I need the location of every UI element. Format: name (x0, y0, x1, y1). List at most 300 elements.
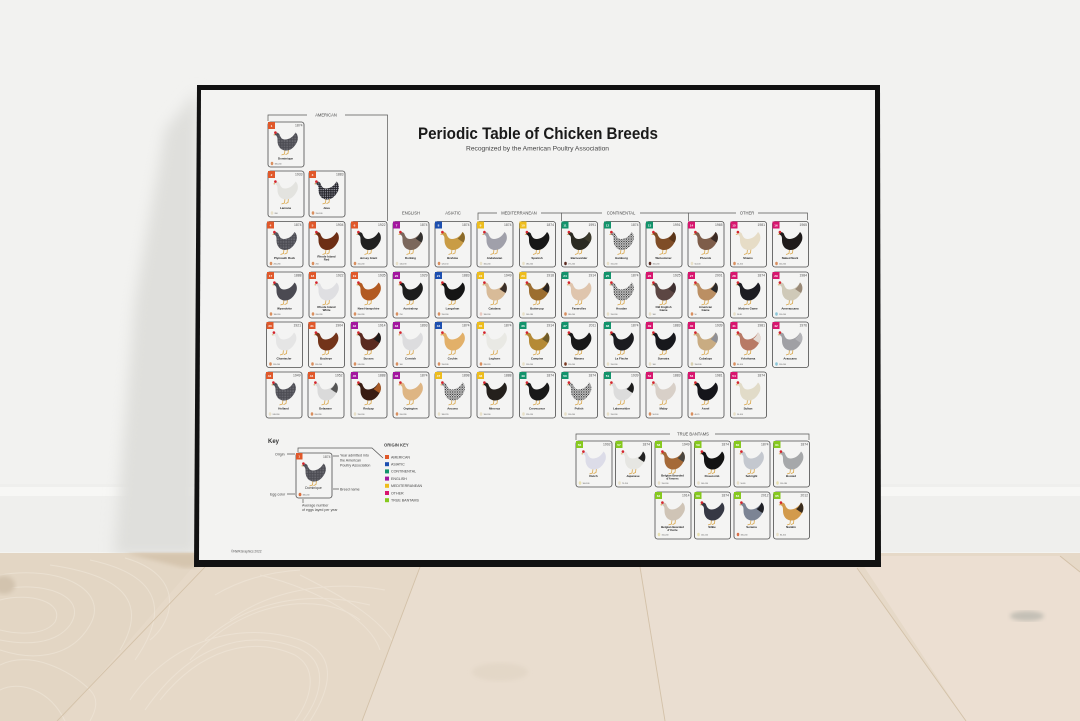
card: Belgian Bearded d'Uccle: 150-200 (662, 534, 668, 536)
card: Nankin: 2012 (800, 494, 808, 498)
card: Buckeye: 1904 (335, 324, 343, 328)
card: Java: 150-180 (316, 213, 322, 215)
card: Buttercup (520, 272, 556, 318)
picture frame (194, 85, 881, 567)
card: Lamona (268, 171, 304, 217)
card: Belgian Bearded d'Anvers: d'Anvers (666, 476, 679, 480)
card: Plymouth Rock: 1874 (294, 223, 302, 227)
card: Welsummer: 1991 (673, 223, 681, 227)
card: Rhode Island White: 18 (311, 274, 314, 278)
key: annotated sample card: Egg color (270, 492, 286, 496)
card: Sumatra: 39 (648, 324, 651, 328)
card: Orpington: 1874 (420, 374, 428, 378)
card: Dominique (268, 122, 304, 167)
card: Shamo: Shamo (743, 256, 753, 260)
card: Sultan: 1874 (757, 374, 765, 378)
card: Phoenix (688, 222, 724, 267)
card: Ameraucana: 150-200 (779, 314, 786, 316)
card: Old English Game: 1925 (673, 274, 681, 278)
card: Cornish: Cornish (405, 356, 416, 360)
card: Chantecler: 30 (268, 324, 272, 328)
card: Cubalaya: Cubalaya (699, 356, 712, 360)
card: Rosecomb: Rosecomb (705, 474, 720, 478)
card: Crevecoeur: 120-150 (526, 414, 533, 416)
card: Holland: 240-260 (272, 414, 279, 416)
card: Orpington: 46 (395, 374, 398, 378)
card: Andalusian: 1874 (504, 223, 512, 227)
card: Brahma: 120-150 (442, 263, 448, 265)
card: Nankin (774, 492, 810, 539)
card: Crevecoeur: Crevecoeur (529, 406, 546, 410)
card: Marans: Marans (574, 356, 584, 360)
card: Langshan: 1883 (462, 274, 470, 278)
card: Rosecomb: 100-150 (701, 483, 708, 485)
card: Barnevelder: 11 (563, 223, 567, 227)
card: Plymouth Rock: Plymouth Rock (274, 256, 295, 260)
card: Shamo: 15 (732, 223, 736, 227)
card: Belgian Bearded d'Uccle (655, 492, 691, 539)
card: Australorp: Australorp (403, 306, 418, 310)
card: Holland: 43 (268, 374, 271, 378)
copyright: ©NWKGraphics 2022 (231, 550, 262, 554)
card: Catalana (477, 272, 513, 318)
card: Ancona: 1898 (462, 374, 470, 378)
card: Hamburg (604, 222, 640, 267)
card: Barnevelder (562, 222, 598, 267)
card: Wyandotte (267, 272, 303, 318)
card: Naked Neck (772, 222, 808, 267)
key: annotated sample card: 1874 (323, 455, 331, 459)
card: Serama: Serama (746, 525, 757, 529)
key: annotated sample card: Poultry Association (340, 463, 370, 467)
card: Modern Game: 1874 (757, 274, 765, 278)
card: Lamona: 1933 (295, 172, 303, 176)
card: Rhode Island White: Rhode Island (317, 305, 336, 309)
card: Spanish: 1874 (546, 223, 554, 227)
card: Redcap (351, 372, 387, 418)
origin key legend (384, 442, 423, 502)
card: Sultan: 54 (732, 374, 736, 378)
card: Modern Game: Modern Game (738, 306, 758, 310)
card: Cochin (435, 322, 471, 368)
card: Phoenix: 50-100 (694, 263, 700, 265)
card: New Hampshire: New Hampshire (358, 306, 380, 310)
card: Naked Neck: Naked Neck (782, 256, 799, 260)
card: Dorking: 1874 (420, 223, 428, 227)
card: Belgian Bearded d'Anvers: Belgian Bearded (661, 474, 684, 478)
card: Cubalaya: 40 (690, 324, 693, 328)
card: Belgian Bearded d'Anvers: 58 (657, 443, 660, 447)
card: La Fleche: 150-200 (610, 364, 617, 366)
card: American Game: Game (701, 308, 710, 312)
group label: english: ENGLISH (402, 210, 420, 216)
card: Holland: 1949 (293, 374, 301, 378)
card: Ancona: 47 (437, 374, 440, 378)
card: Campine: 36 (521, 324, 525, 328)
card: Ameraucana (772, 272, 808, 318)
key: annotated sample card (270, 448, 383, 512)
card: Polish: Polish (575, 406, 584, 410)
card: Aseel (688, 372, 724, 418)
card: Java (309, 171, 345, 217)
card: Booted: 1874 (800, 442, 808, 446)
card: Cubalaya: 150-180 (694, 364, 701, 366)
card: Buttercup: 140-180 (526, 314, 533, 316)
card: Lakenvelder: Lakenvelder (613, 406, 631, 410)
card: Welsummer (646, 222, 682, 267)
card: Old English Game: Game (659, 308, 668, 312)
card: Andalusian: 160-200 (484, 263, 490, 265)
card: Old English Game: 100 (652, 314, 656, 316)
card: Silkie: 63 (696, 494, 700, 498)
card: Faverolles: 1914 (588, 274, 596, 278)
origin key legend: MEDITERRANEAN (391, 484, 423, 488)
card: Marans: 2011 (589, 324, 596, 328)
card: Houdan: 150-200 (610, 314, 617, 316)
card: Buckeye: Buckeye (320, 356, 332, 360)
card: Houdan: 25 (606, 274, 609, 278)
card: Marans: 37 (563, 324, 567, 328)
card: Crevecoeur (520, 372, 556, 418)
card: Dominique: 1 (271, 124, 273, 128)
card: Araucana: 150-200 (779, 364, 786, 366)
card: Nankin: 65 (775, 494, 779, 498)
card: Rhode Island Red: Rhode Island (317, 254, 336, 258)
card: Lakenvelder (604, 372, 640, 418)
card: Welsummer: Welsummer (655, 256, 673, 260)
card: Dominique: 180-200 (274, 163, 281, 165)
card: Cornish: 33 (395, 324, 398, 328)
card: Minorca: 1888 (504, 374, 512, 378)
key heading: Key (268, 439, 280, 445)
card: Sumatra: 100 (652, 364, 656, 366)
card: Lakenvelder: 1939 (631, 374, 639, 378)
card: Modern Game (730, 272, 766, 318)
card: Faverolles: 24 (563, 274, 567, 278)
key: annotated sample card: Breed name (340, 488, 360, 492)
card: Yokohama: 80-100 (737, 364, 743, 366)
card: Rhode Island White: 200-280 (316, 314, 322, 316)
key: annotated sample card: Origin (275, 452, 285, 456)
card: Serama: 180-200 (740, 534, 747, 536)
card: Spanish: 180-200 (526, 263, 533, 265)
card: Lamona: 200 (274, 213, 278, 215)
card: Sussex: 32 (353, 324, 356, 328)
card: Modern Game: 50-80 (737, 314, 742, 316)
card: Rhode Island Red: Red (324, 258, 329, 262)
group bracket: true bantams: TRUE BANTAMS (677, 432, 709, 436)
card: Rhode Island Red (309, 222, 345, 267)
card: Spanish: 10 (521, 223, 525, 227)
card: Sussex: Sussex (363, 356, 374, 360)
group bracket: true bantams (576, 432, 809, 440)
card: Sebright: Sebright (746, 474, 757, 478)
card: Faverolles: Faverolles (572, 306, 587, 310)
card: Malay: 50-100 (652, 414, 658, 416)
card: Chantecler: Chantecler (277, 356, 292, 360)
card: Redcap: 45 (353, 374, 356, 378)
card: Sumatra: 1883 (673, 324, 681, 328)
wood knot right (1010, 611, 1044, 621)
card: Lakenvelder: 150-200 (610, 414, 617, 416)
baseboard (0, 484, 1080, 555)
card: Araucana (772, 322, 808, 368)
card: Wyandotte: 180-260 (274, 314, 280, 316)
card: Buttercup: 1918 (546, 274, 554, 278)
card: Leghorn: 35 (479, 324, 482, 328)
card: Houdan (604, 272, 640, 318)
card: Cochin: 150-180 (442, 364, 448, 366)
card: Rhode Island White: White (323, 308, 331, 312)
card: Nankin: Nankin (786, 525, 796, 529)
card: Belgian Bearded d'Uccle: d'Uccle (667, 528, 678, 532)
card: Sultan (730, 372, 766, 418)
card: Leghorn: 1874 (504, 324, 512, 328)
card: Sultan: 50-100 (737, 414, 743, 416)
group bracket: american: AMERICAN (315, 112, 337, 118)
card: Phoenix: Phoenix (700, 256, 712, 260)
card: Yokohama: 41 (732, 324, 736, 328)
card: Minorca: 160-200 (484, 414, 490, 416)
card: Booted (774, 441, 810, 487)
card: Shamo (730, 222, 766, 267)
card: Brahma (435, 222, 471, 267)
subtitle: Recognized by the American Poultry Association (466, 146, 609, 152)
card: Australorp (393, 272, 429, 318)
card: Naked Neck: 100-200 (779, 263, 786, 265)
card: Spanish: Spanish (531, 256, 543, 260)
card: Japanese: 57 (617, 443, 621, 447)
card: Hamburg: 150-200 (610, 263, 617, 265)
card: Silkie: Silkie (708, 525, 716, 529)
card: Polish: 50 (563, 374, 567, 378)
card: Shamo: 50-100 (737, 263, 743, 265)
card: Leghorn (477, 322, 513, 368)
card: Rosecomb (694, 441, 730, 487)
card: Dominique: Dominique (278, 156, 293, 160)
card: Sumatra (646, 322, 682, 368)
card: Jersey Giant (351, 222, 387, 267)
group bracket: american (268, 112, 388, 221)
card: La Fleche: 38 (606, 324, 609, 328)
card: Belgian Bearded d'Uccle: 1914 (682, 494, 690, 498)
card: Orpington: Orpington (404, 406, 418, 410)
card: Dutch: 160-180 (582, 483, 589, 485)
card: Belgian Bearded d'Uccle: 62 (657, 494, 660, 498)
group label: asiatic: ASIATIC (445, 210, 461, 216)
card: Wyandotte: 1888 (294, 274, 302, 278)
card: Shamo: 1981 (757, 223, 765, 227)
card: Brahma: 1874 (462, 223, 470, 227)
card: Lamona: 2 (271, 173, 273, 177)
card: Aseel: 1981 (715, 374, 723, 378)
card: Catalana: 1949 (504, 274, 512, 278)
card: American Game: 2001 (715, 274, 723, 278)
card: Malay: 1883 (673, 374, 681, 378)
card: Campine: 150-200 (526, 364, 533, 366)
card: Japanese (616, 441, 652, 487)
card: Polish: 1874 (588, 374, 596, 378)
card: Hamburg: 1874 (631, 223, 639, 227)
card: Rhode Island Red: 5 (312, 223, 314, 227)
card: Leghorn: 280-320 (484, 364, 490, 366)
card: La Fleche (604, 322, 640, 368)
card: La Fleche: La Fleche (615, 356, 629, 360)
card: Delaware: 200-280 (314, 414, 321, 416)
card: Minorca: 48 (479, 374, 482, 378)
group bracket: other: OTHER (740, 210, 754, 216)
card: Orpington (393, 372, 429, 418)
card: Campine (520, 322, 556, 368)
card: Barnevelder: Barnevelder (571, 256, 588, 260)
card: Araucana: 42 (774, 324, 778, 328)
card: Buckeye (308, 322, 344, 368)
group bracket: other (688, 210, 808, 220)
card: Redcap: 150-200 (358, 414, 364, 416)
card: American Game: 27 (690, 274, 693, 278)
card: Langshan: Langshan (446, 306, 460, 310)
card: Japanese: 1874 (642, 442, 650, 446)
card: Cubalaya (688, 322, 724, 368)
card: Andalusian (477, 222, 513, 267)
card: Cornish (393, 322, 429, 368)
card: Rhode Island White: 1922 (336, 274, 344, 278)
card: American Game: 50 (694, 314, 697, 316)
card: Java: Java (323, 206, 330, 210)
card: Old English Game: 26 (648, 274, 651, 278)
card: Silkie: 1874 (721, 494, 729, 498)
card: Plymouth Rock: 4 (270, 223, 272, 227)
card: Rhode Island Red: 1904 (336, 223, 344, 227)
card: Redcap: Redcap (363, 406, 374, 410)
card: Dutch (576, 441, 612, 487)
card: Catalana: 180-200 (484, 314, 490, 316)
key: annotated sample card: Year admitted into (340, 453, 369, 457)
card: Sussex: 1914 (378, 324, 386, 328)
card: Langshan: 21 (437, 274, 440, 278)
card: Holland (266, 372, 302, 418)
frame shadow on wall (114, 90, 198, 556)
card: Phoenix: 1965 (715, 223, 723, 227)
card: Malay (646, 372, 682, 418)
key: annotated sample card: the American (340, 458, 361, 462)
card: Booted: Booted (786, 474, 796, 478)
card: Jersey Giant: Jersey Giant (360, 256, 377, 260)
card: Plymouth Rock: 200-280 (274, 263, 280, 265)
card: Rhode Island White (309, 272, 345, 318)
card: Serama: 64 (736, 494, 739, 498)
card: Faverolles: 180-240 (568, 314, 575, 316)
card: Lakenvelder: 51 (606, 374, 609, 378)
card: Barnevelder: 1991 (588, 223, 596, 227)
card: Brahma: Brahma (447, 256, 458, 260)
card: Ameraucana: 1984 (799, 274, 807, 278)
card: Buttercup: 23 (521, 274, 525, 278)
card: Sebright: 1874 (761, 442, 769, 446)
origin key legend: AMERICAN (391, 455, 410, 459)
card: Jersey Giant: 1922 (378, 223, 386, 227)
card: Wyandotte: 17 (269, 274, 272, 278)
origin key legend: TRUE BANTAMS (391, 498, 419, 502)
card: Sumatra: Sumatra (658, 356, 670, 360)
origin key legend: ORIGIN KEY (384, 442, 409, 448)
card: Catalana: Catalana (488, 306, 501, 310)
card: Holland: Holland (278, 406, 289, 410)
card: Plymouth Rock (267, 222, 303, 267)
card: La Fleche: 1874 (631, 324, 639, 328)
card: Cochin: Cochin (448, 356, 458, 360)
card: Polish: 150-200 (568, 414, 575, 416)
origin key legend: ASIATIC (391, 462, 405, 466)
card: Booted: 61 (775, 443, 779, 447)
card: Houdan: Houdan (616, 306, 627, 310)
card: Sultan: Sultan (744, 406, 753, 410)
card: Brahma: 8 (438, 223, 440, 227)
card: Dorking (393, 222, 429, 267)
card: Chantecler (266, 322, 302, 368)
card: Phoenix: 14 (690, 223, 693, 227)
card: Old English Game: Old English (655, 305, 672, 309)
card: Java: 3 (312, 173, 314, 177)
card: Chantecler: 150-200 (273, 364, 280, 366)
card: Barnevelder: 175-200 (568, 263, 575, 265)
card: Campine: 1914 (546, 324, 554, 328)
card: Old English Game (646, 272, 682, 318)
card: Belgian Bearded d'Anvers: 1949 (682, 442, 690, 446)
group bracket: continental (562, 210, 688, 221)
title: Periodic Table of Chicken Breeds (418, 125, 658, 143)
card: Modern Game: 28 (732, 274, 736, 278)
card: Dutch: 56 (578, 443, 581, 447)
card: Serama: 2012 (761, 494, 769, 498)
card: Minorca (477, 372, 513, 418)
card: Langshan: 150-200 (442, 314, 448, 316)
card: Rosecomb: 59 (696, 443, 700, 447)
card: New Hampshire (351, 272, 387, 318)
card: Ancona: Ancona (447, 406, 458, 410)
card: Ameraucana: 29 (774, 274, 778, 278)
poster sheet (199, 90, 875, 560)
card: Australorp: 250 (400, 314, 403, 316)
card: Yokohama: Yokohama (741, 356, 756, 360)
card: Belgian Bearded d'Uccle: Belgian Bearded (661, 525, 684, 529)
card: Welsummer: 13 (648, 223, 651, 227)
card: Marans (562, 322, 598, 368)
card: Ancona: 180-220 (442, 414, 448, 416)
card: Spanish (520, 222, 556, 267)
key: annotated sample card: of eggs layed per year (302, 508, 338, 512)
card: Hamburg: Hamburg (615, 256, 628, 260)
card: Sebright (734, 441, 770, 487)
card: Malay: 52 (648, 374, 651, 378)
card: Orpington: 200-280 (400, 414, 406, 416)
card: Delaware (308, 372, 344, 418)
wood knot left (0, 576, 15, 594)
card: Faverolles (562, 272, 598, 318)
card: Delaware: Delaware (319, 406, 332, 410)
card: Silkie (694, 492, 730, 539)
card: Serama (734, 492, 770, 539)
card: Wyandotte: Wyandotte (277, 306, 292, 310)
card: Dorking: 7 (396, 223, 398, 227)
card: Langshan (435, 272, 471, 318)
key: annotated sample card: Dominique (305, 486, 322, 490)
card: Dutch: Dutch (589, 474, 598, 478)
card: Redcap: 1888 (378, 374, 386, 378)
card: Aseel: 53 (690, 374, 693, 378)
card: Jersey Giant: 150-200 (358, 263, 364, 265)
card: Crevecoeur: 1874 (546, 374, 554, 378)
